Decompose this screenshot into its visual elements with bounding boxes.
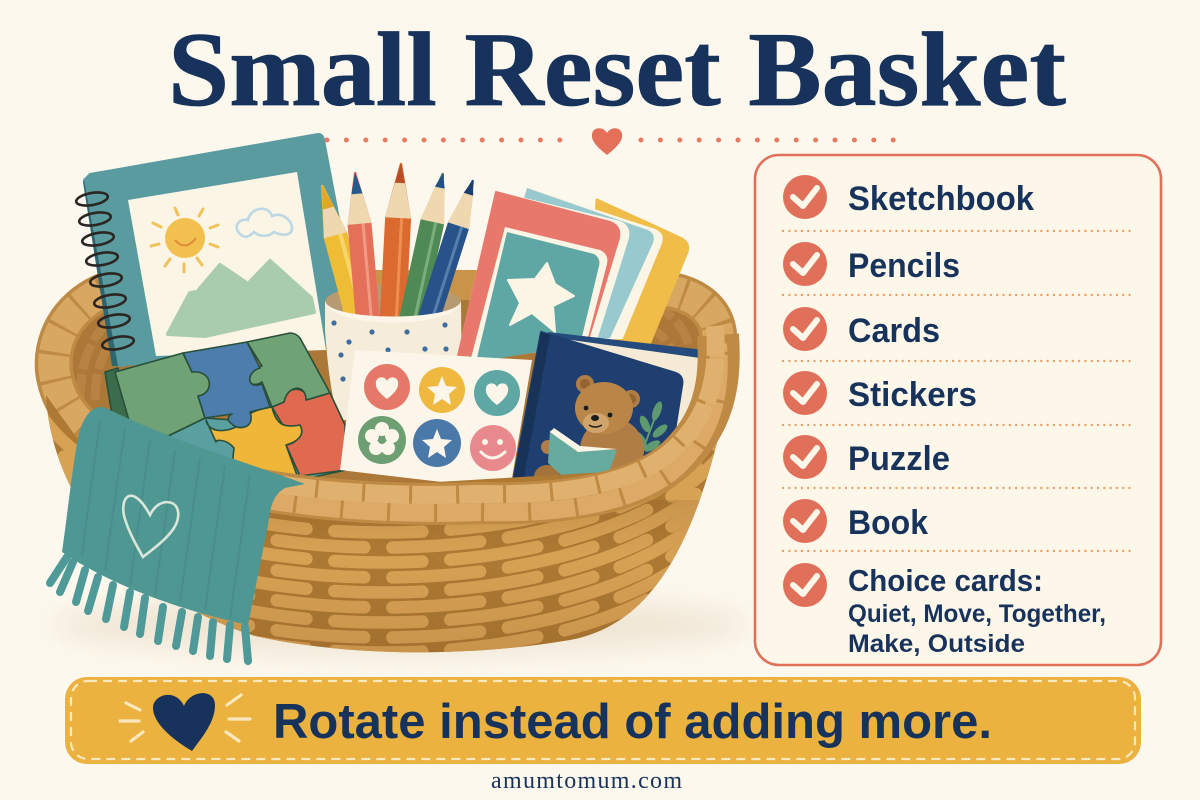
item: Choice cards: Choice cards: [848,563,1043,598]
item: Cards: Cards [848,312,940,350]
sticker: teal heart [474,370,520,416]
title divider with heart [327,128,900,155]
basket interior [55,283,717,505]
icon: heart with rays [120,693,250,751]
pencil cup back [325,284,461,320]
item: Choice cards: Make, Outside [848,630,1025,658]
puzzle [105,333,346,480]
basket front rim [247,326,719,513]
cards: yellow [590,200,688,342]
bear book [512,332,708,505]
drawing: sun [151,208,218,272]
puzzle piece: red [272,389,346,476]
puzzle piece: right green [244,333,330,407]
sticker: smiley [470,425,516,471]
title: Small Reset Basket [168,11,1066,128]
item: Choice cards: Quiet, Move, Together, [848,600,1106,628]
sticker: star [419,367,465,413]
blanket heart stitching [123,496,178,557]
basket body weave [46,395,718,652]
cards: light blue [480,188,662,345]
blanket [50,407,305,661]
item: Book: Book [848,504,928,542]
row dividers [783,231,1133,551]
item: Stickers: Stickers [848,376,977,414]
sketchbook [75,134,362,366]
sticker sheet [340,350,532,490]
leaf sprig [633,400,669,458]
card: teal with star [470,227,607,362]
item: Sketchbook [783,175,1034,219]
pencil: orange [380,162,414,321]
basket back rim [54,285,718,425]
pencil cup [325,300,462,420]
item: Cards [783,307,940,351]
checklist panel [755,155,1161,665]
item: Book [783,499,928,543]
drawing: cloud [237,209,292,237]
drawing: mountains [168,261,314,336]
basket interior weave [80,305,691,400]
item: Puzzle [783,435,950,479]
sticker: flower [358,416,406,464]
pencil: red [343,171,380,320]
cards: coral [458,192,628,356]
basket ground shadow [50,595,750,655]
footer website: amumtomum.com [491,768,682,794]
banner message: Rotate instead of adding more. [273,695,992,749]
item: Pencils: Pencils [848,247,960,285]
bear's small open book [548,430,617,485]
item: Sketchbook: Sketchbook [848,180,1034,218]
item: Choice cards [783,563,1106,658]
pencil: blue [418,177,483,321]
puzzle piece: blue [183,342,270,428]
blanket ribs [82,420,250,618]
blanket fringe [50,557,248,661]
puzzle piece: yellow [206,407,302,478]
item: Stickers [783,371,977,415]
pencil: green [399,170,455,322]
puzzle base [168,418,346,480]
sticker: heart [364,364,410,410]
sketchbook spiral binding [75,190,135,352]
sticker: blue star [413,419,461,467]
item: Pencils [783,242,960,286]
pencil: yellow [310,182,369,321]
puzzle piece: left green [115,353,214,436]
banner [65,677,1141,764]
basket illustration [30,134,750,670]
bear [534,375,644,489]
item: Puzzle: Puzzle [848,440,950,478]
